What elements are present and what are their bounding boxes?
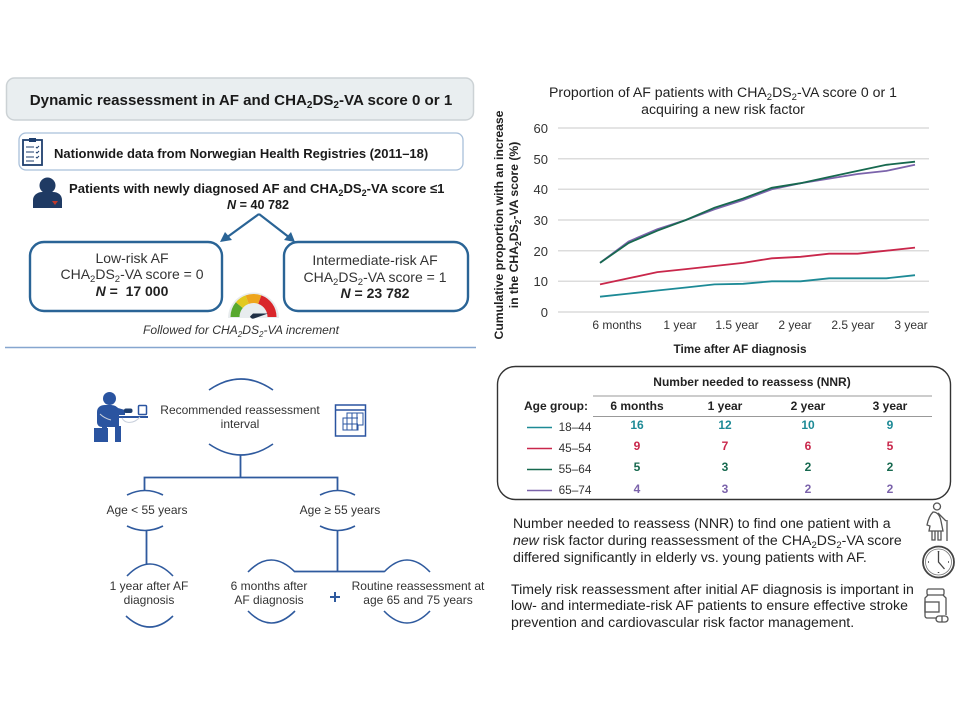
- text block: NNR finding: Number needed to reassess (NNR) to find one patient with a: [513, 515, 891, 531]
- text block: NNR finding: -VA score: [842, 532, 902, 548]
- row: 65–74: 65–74: [559, 483, 592, 497]
- title banner: DS: [312, 92, 333, 109]
- y axis labels: 60: [534, 121, 548, 136]
- icon: calendar: [336, 405, 366, 436]
- y axis title: 2: [513, 241, 523, 246]
- panel: reassessment decision tree: [94, 379, 485, 627]
- panel: intermediate-risk AF: 2: [333, 277, 338, 288]
- row: 18–44: [527, 418, 894, 434]
- series: 65–74: [600, 165, 915, 263]
- node: 1 year after diagnosis: [110, 564, 188, 627]
- line chart: cumulative proportion: [492, 110, 929, 356]
- patient population text: -VA score ≤1: [367, 181, 444, 196]
- table header row: 3 year: [873, 399, 908, 413]
- table header row: [524, 399, 908, 413]
- row: 55–64: 55–64: [559, 462, 592, 476]
- x axis labels: 1 year: [663, 318, 697, 332]
- patient population text: [69, 181, 444, 212]
- follow-up caption: DS: [242, 323, 259, 337]
- x axis labels: 2.5 year: [831, 318, 875, 332]
- y axis title: 2: [513, 219, 523, 224]
- panel: intermediate-risk AF: DS: [338, 269, 358, 285]
- text block: NNR finding: DS: [817, 532, 836, 548]
- text block: conclusion: Timely risk reassessment after initial AF diagnosis is important in: [511, 581, 914, 597]
- node: routine reassessment: [352, 560, 485, 623]
- panel: number needed to reassess table: Number needed to reassess (NNR): [653, 375, 851, 389]
- icon: risk gauge: [228, 292, 279, 319]
- y axis labels: 20: [534, 244, 548, 259]
- icon: clipboard checklist: [23, 138, 42, 165]
- x axis title: Time after AF diagnosis: [673, 342, 807, 356]
- text block: NNR finding: 2: [836, 540, 842, 551]
- panel: number needed to reassess table: [498, 366, 950, 500]
- y axis labels: 10: [534, 274, 548, 289]
- panel: low-risk AF: DS: [95, 266, 115, 282]
- node: routine reassessment: Routine reassessment at: [352, 579, 485, 593]
- data source panel: [19, 133, 463, 170]
- text block: NNR finding: differed significantly in elderly vs. young patients with AF.: [513, 549, 867, 565]
- row: 55–64: 2: [805, 460, 812, 474]
- x axis labels: 2 year: [778, 318, 812, 332]
- node: 6 months after diagnosis: [231, 560, 307, 623]
- row: 18–44: 16: [630, 418, 644, 432]
- text block: conclusion: low- and intermediate-risk AF patients to ensure effective stroke: [511, 597, 908, 613]
- chart title: acquiring a new risk factor: [641, 101, 805, 117]
- y axis labels: 30: [534, 213, 548, 228]
- title banner: 2: [307, 100, 313, 111]
- row: 55–64: 2: [887, 460, 894, 474]
- panel: intermediate-risk AF: CHA: [303, 269, 333, 285]
- y axis title: [492, 110, 523, 339]
- patient population text: N = 40 782: [227, 198, 289, 212]
- icon: patient having blood pressure measured: [94, 392, 148, 442]
- chart title: 2: [792, 92, 797, 103]
- series: 18–44: [600, 275, 915, 297]
- row: 65–74: [527, 482, 894, 497]
- node: age 55 or over: [300, 490, 380, 530]
- row: 45–54: 5: [887, 439, 894, 453]
- data source panel: Nationwide data from Norwegian Health Registries (2011–18): [54, 146, 428, 161]
- panel: intermediate-risk AF: Intermediate-risk AF: [312, 252, 438, 268]
- row: 55–64: [527, 460, 894, 476]
- chart title: DS: [772, 84, 792, 100]
- panel: low-risk AF: 2: [90, 274, 95, 285]
- table header row: Age group:: [524, 399, 588, 413]
- row: 45–54: 6: [805, 439, 812, 453]
- icon: elderly person with cane: [927, 503, 947, 541]
- panel: low-risk AF: [30, 242, 222, 311]
- row: 45–54: 45–54: [559, 441, 592, 455]
- row: 55–64: 5: [634, 460, 641, 474]
- panel: intermediate-risk AF: 2: [358, 277, 363, 288]
- chart title: 2: [767, 92, 772, 103]
- panel: intermediate-risk AF: -VA score = 1: [363, 269, 447, 285]
- chart title: -VA score 0 or 1: [797, 84, 897, 100]
- connectors: [144, 455, 384, 572]
- text block: NNR finding: 2: [811, 540, 817, 551]
- node: age under 55: Age < 55 years: [106, 503, 188, 517]
- y axis title: DS: [507, 224, 521, 241]
- text block: NNR finding: risk factor during reassessment of the CHA: [539, 532, 812, 548]
- patient population text: 2: [362, 188, 367, 198]
- title banner: Dynamic reassessment in AF and CHA: [30, 92, 307, 109]
- row: 45–54: [527, 439, 894, 455]
- row: 55–64: 3: [722, 460, 729, 474]
- patient population text: Patients with newly diagnosed AF and CHA: [69, 181, 338, 196]
- text block: conclusion: prevention and cardiovascular risk factor management.: [511, 614, 854, 630]
- panel: intermediate-risk AF: [284, 242, 468, 311]
- y axis labels: [534, 121, 548, 320]
- arrows: split into two risk groups: [220, 214, 295, 242]
- table header row: 6 months: [610, 399, 664, 413]
- node: recommended reassessment interval: interval: [221, 417, 259, 431]
- icon: clock: [923, 546, 954, 578]
- node: 1 year after diagnosis: 1 year after AF: [110, 579, 188, 593]
- x axis labels: 6 months: [592, 318, 642, 332]
- x axis labels: 1.5 year: [715, 318, 759, 332]
- patient population text: DS: [343, 181, 362, 196]
- node: 6 months after diagnosis: 6 months after: [231, 579, 307, 593]
- node: routine reassessment: age 65 and 75 years: [363, 593, 473, 607]
- row: 18–44: 10: [801, 418, 815, 432]
- chart title: Proportion of AF patients with CHA: [549, 84, 767, 100]
- row: 18–44: 18–44: [559, 420, 592, 434]
- row: 65–74: 2: [887, 482, 894, 496]
- follow-up caption: Followed for CHA: [143, 323, 238, 337]
- row: 18–44: 9: [887, 418, 894, 432]
- panel: low-risk AF: -VA score = 0: [120, 266, 204, 282]
- panel: low-risk AF: 2: [115, 274, 120, 285]
- node: recommended reassessment interval: [160, 379, 320, 455]
- y axis labels: 0: [541, 305, 548, 320]
- table header row: 1 year: [708, 399, 743, 413]
- series: 45–54: [600, 248, 915, 284]
- node: recommended reassessment interval: Recommended reassessment: [160, 403, 320, 417]
- y axis labels: 40: [534, 182, 548, 197]
- follow-up caption: 2: [237, 330, 243, 339]
- x axis labels: [592, 318, 928, 332]
- patient population text: 2: [338, 188, 343, 198]
- node: age under 55: [106, 490, 188, 530]
- panel: low-risk AF: CHA: [60, 266, 90, 282]
- panel: intermediate-risk AF: N = 23 782: [341, 285, 410, 301]
- title banner: -VA score 0 or 1: [339, 92, 452, 109]
- y axis labels: 50: [534, 152, 548, 167]
- row: 45–54: 9: [634, 439, 641, 453]
- table header row: 2 year: [791, 399, 826, 413]
- follow-up caption: -VA increment: [263, 323, 340, 337]
- y axis title: in the CHA: [507, 246, 521, 308]
- icon: pill bottle: [925, 589, 948, 622]
- row: 65–74: 2: [805, 482, 812, 496]
- y axis title: Cumulative proportion with an increase: [492, 110, 506, 339]
- node: 1 year after diagnosis: diagnosis: [124, 593, 174, 607]
- panel: low-risk AF: Low-risk AF: [95, 250, 169, 266]
- title banner: [6, 78, 474, 120]
- row: 45–54: 7: [722, 439, 729, 453]
- row: 18–44: 12: [718, 418, 732, 432]
- icon: patient: [33, 178, 62, 208]
- y axis title: -VA score (%): [507, 142, 521, 220]
- row: 65–74: 4: [634, 482, 641, 496]
- follow-up caption: 2: [258, 330, 264, 339]
- row: 65–74: 3: [722, 482, 729, 496]
- series: 55–64: [600, 162, 915, 263]
- plus sign: [330, 592, 340, 602]
- panel: low-risk AF: N = 17 000: [96, 283, 169, 299]
- node: 6 months after diagnosis: AF diagnosis: [234, 593, 304, 607]
- x axis labels: 3 year: [894, 318, 928, 332]
- text block: NNR finding: new: [513, 532, 540, 548]
- title banner: 2: [333, 100, 339, 111]
- node: age 55 or over: Age ≥ 55 years: [300, 503, 380, 517]
